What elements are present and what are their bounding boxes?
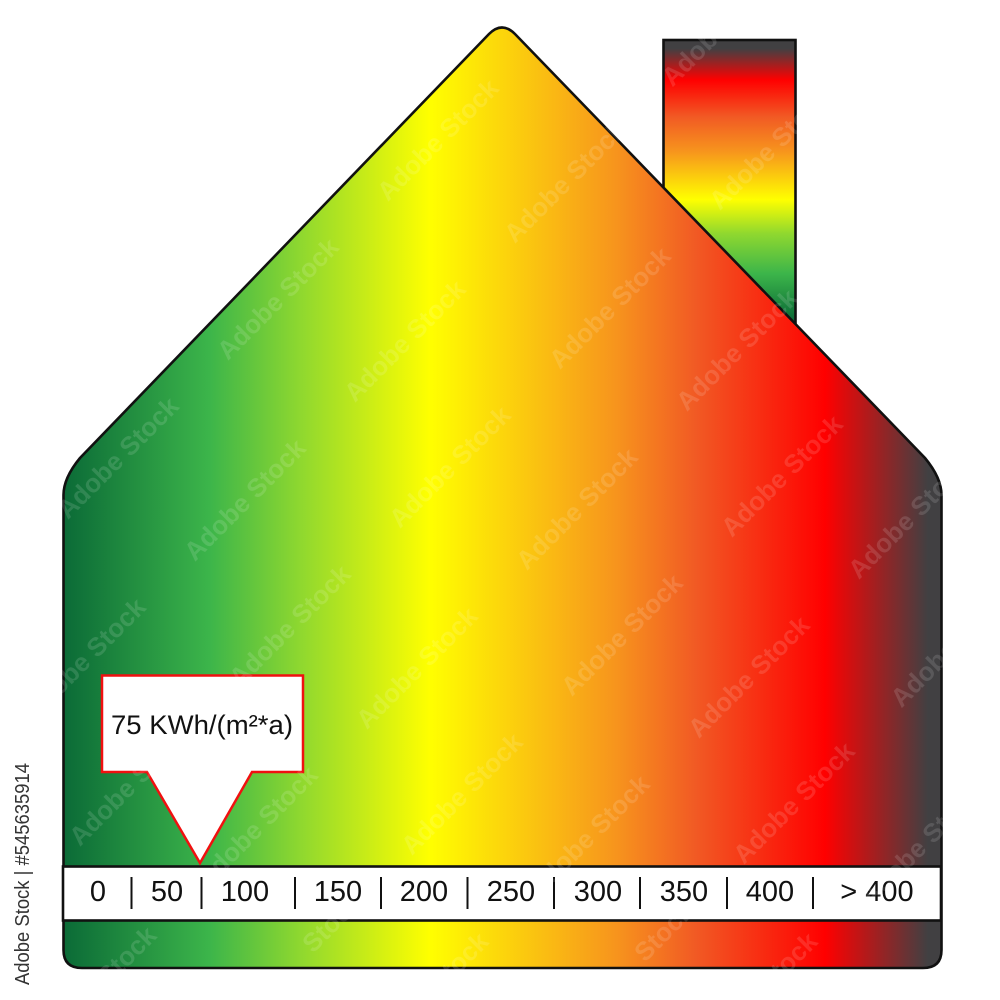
watermark pattern: Adobe Stock (395, 726, 529, 860)
watermark pattern: Adobe Stock (39, 63, 173, 197)
watermark pattern: Adobe Stock (543, 240, 677, 374)
watermark pattern: Adobe Stock (830, 123, 964, 257)
scale values: 400 (746, 876, 794, 908)
scale values: > 400 (840, 876, 914, 908)
watermark pattern: Adobe Stock (682, 609, 816, 743)
watermark pattern: Adobe Stock (727, 735, 861, 869)
watermark pattern: Stock (423, 926, 495, 997)
watermark pattern: Adobe Stock (63, 717, 197, 851)
watermark pattern: Adobe Stock (555, 567, 689, 701)
watermark pattern: Adobe Stock (863, 259, 997, 393)
scale values (90, 876, 914, 908)
watermark pattern: Adobe Stock (18, 591, 152, 725)
watermark pattern: Adobe Stock (510, 441, 644, 575)
chimney (664, 40, 796, 330)
scale values: 350 (660, 876, 708, 908)
vertical stock id text: Adobe Stock | #545635914 (12, 763, 34, 985)
scale values: 300 (574, 876, 622, 908)
watermark pattern: Adobe Stock (190, 759, 324, 893)
watermark pattern: Adobe Stock (842, 450, 976, 584)
watermark pattern: Adobe Stock (498, 114, 632, 248)
watermark pattern: Adobe Stock (223, 558, 357, 692)
watermark pattern: Adobe Stock (522, 768, 656, 902)
watermark pattern: Adobe Stock (670, 282, 804, 416)
scale values: 200 (400, 876, 448, 908)
watermark pattern: Adobe Stock (178, 432, 312, 566)
watermark pattern: Stock (91, 920, 163, 991)
scale values: 100 (221, 876, 269, 908)
callout value: 75 KWh/(m²*a) (111, 710, 293, 740)
watermark pattern: Adobe Stock (703, 81, 837, 215)
callout shape (102, 676, 303, 863)
watermark pattern: Adobe Stock (371, 72, 505, 206)
watermark pattern: Adobe Stock (715, 408, 849, 542)
watermark pattern: Stock (628, 896, 700, 967)
scale separators (132, 877, 813, 909)
watermark pattern: Stock (752, 926, 824, 997)
watermark pattern: Adobe (655, 13, 734, 92)
scale values: 150 (314, 876, 362, 908)
scale values: 0 (90, 876, 106, 908)
watermark pattern: Adobe Stock (854, 777, 988, 911)
watermark pattern: Adobe Stock (350, 600, 484, 734)
watermark pattern: Adobe (884, 634, 963, 713)
watermark pattern: Adobe Stock (211, 231, 345, 365)
strip background (63, 866, 941, 920)
callout marker (102, 676, 303, 863)
watermark pattern: Adobe Stock (338, 273, 472, 407)
scale strip (63, 866, 941, 920)
watermark pattern: Stock (296, 887, 368, 958)
scale values: 250 (487, 876, 535, 908)
watermark pattern: Adobe Stock (383, 399, 517, 533)
scale values: 50 (151, 876, 183, 908)
watermark pattern: Adobe Stock (6, 264, 140, 398)
watermark pattern: Adobe Stock (166, 105, 300, 239)
watermark pattern: Adobe Stock (51, 390, 185, 524)
